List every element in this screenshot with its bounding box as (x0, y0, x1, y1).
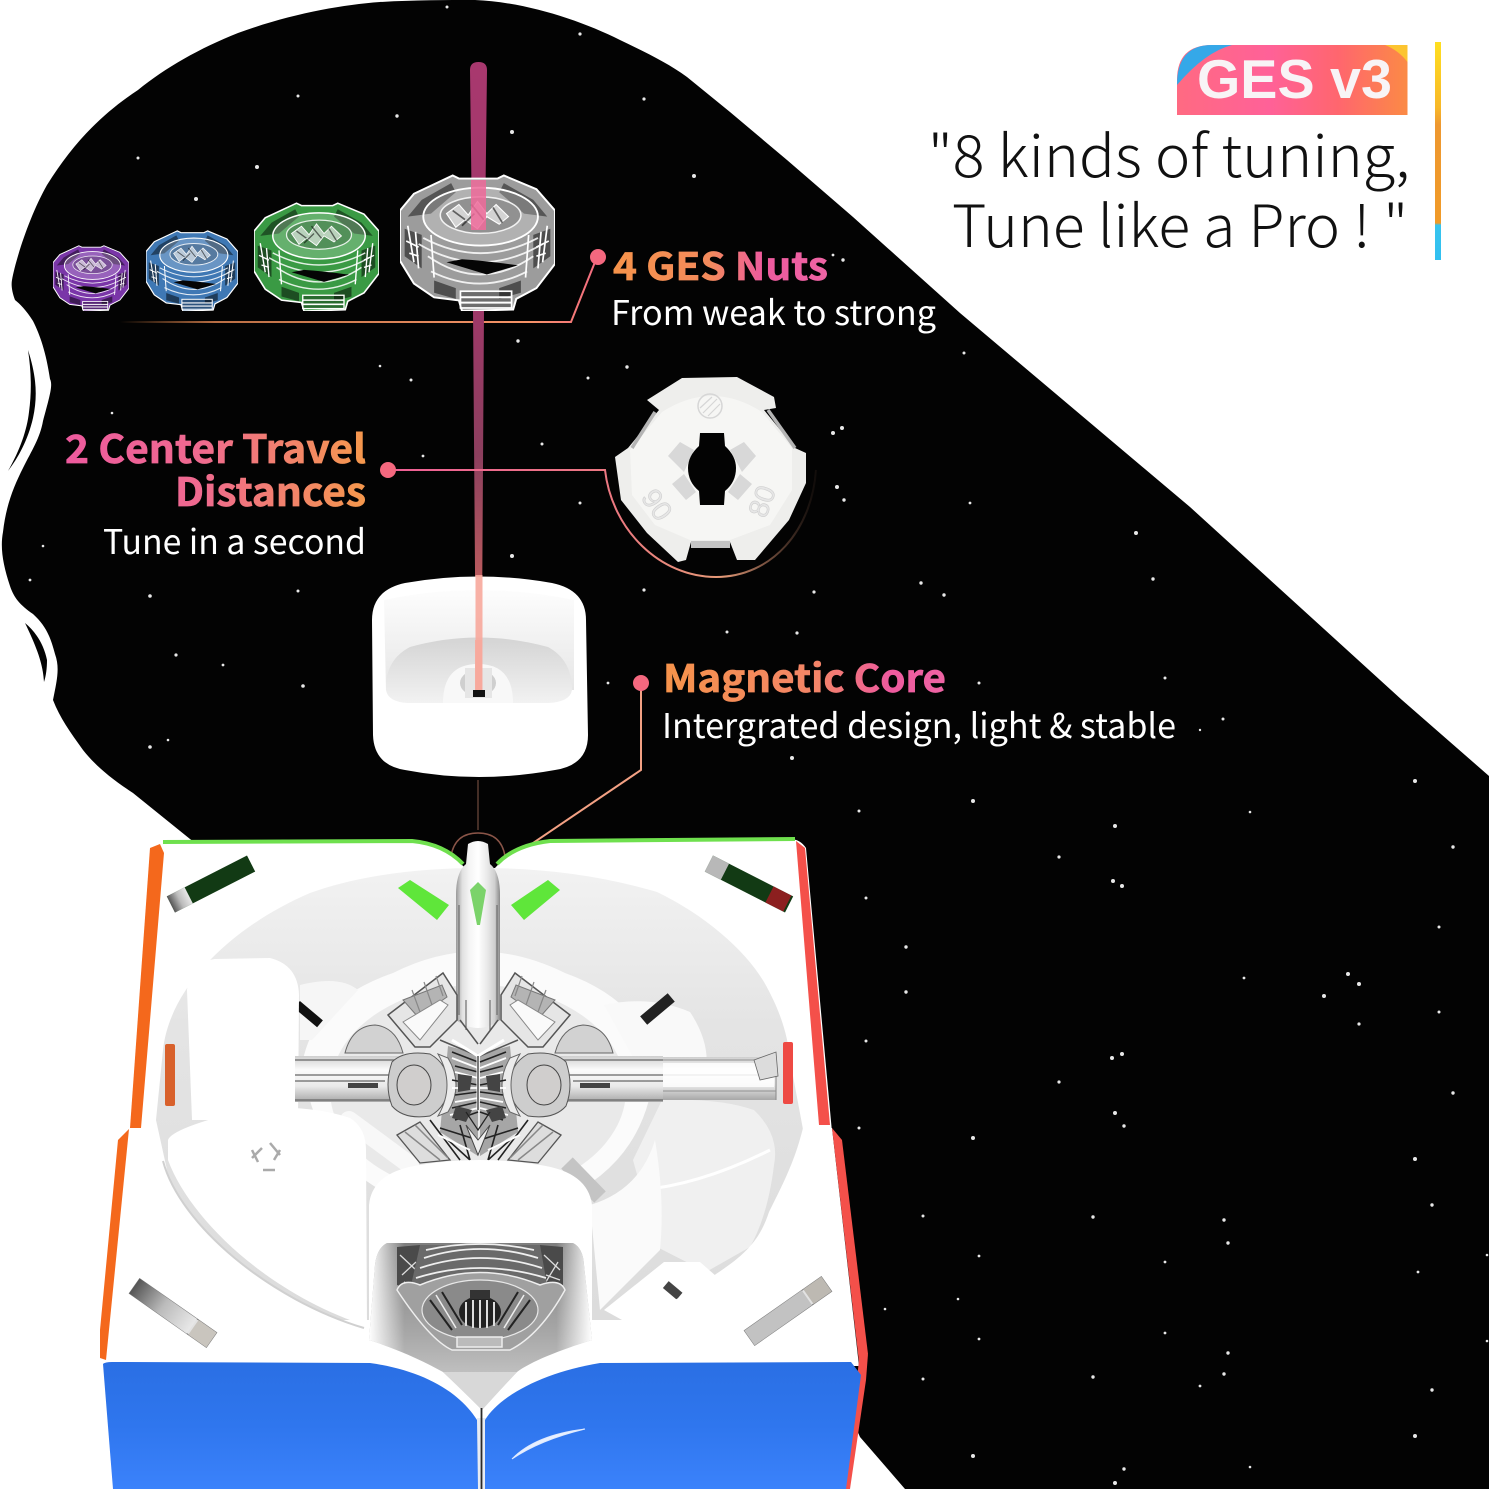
callout label: Magnetic Core: Intergrated design, light & stable (662, 699, 1176, 748)
callout line: magnetic core (451, 675, 649, 862)
slit: top right (705, 856, 793, 912)
wedge (590, 1140, 662, 1310)
cube: blue faces (103, 1354, 868, 1489)
green tab left (398, 880, 449, 920)
callout label: 2 Center Travel Distances: 2 Center Travel (65, 419, 366, 475)
quote: Tune like a Pro ! " (952, 180, 1408, 264)
notch mark (252, 1143, 280, 1170)
magnetic core cup (372, 576, 588, 777)
nut: purple (53, 246, 129, 311)
front orange edge (100, 1129, 129, 1360)
nut: clear (400, 176, 555, 311)
vertical color bar (1435, 42, 1441, 260)
slit: bottom right (744, 1277, 832, 1345)
side tab left (165, 1044, 175, 1106)
center travel ring part (615, 377, 806, 562)
top left white block (187, 958, 299, 1120)
side tab right (783, 1042, 793, 1104)
inner disc (156, 868, 805, 1320)
back red edge (796, 841, 830, 1125)
grey rod (567, 1163, 600, 1197)
front-left white piece (168, 1108, 367, 1326)
back orange edge (130, 844, 164, 1128)
left lobe (300, 981, 358, 1040)
center spine (452, 1040, 504, 1110)
nut: green (254, 203, 379, 311)
white capsule piece (349, 1120, 410, 1165)
laser passing through clear nut (471, 180, 486, 230)
right dome (633, 1100, 775, 1272)
callout label: 4 GES Nuts: 4 GES Nuts (613, 236, 828, 291)
swooshes on the left edge (8, 350, 47, 682)
callout label: 2 Center Travel Distances: Distances (175, 462, 366, 518)
right lobe (604, 1001, 707, 1076)
front center white piece (369, 1160, 592, 1345)
laser axis (470, 62, 487, 700)
slot left (294, 1001, 323, 1027)
callout line: 4 GES nuts (120, 249, 606, 322)
callout label: 2 Center Travel Distances: Tune in a second (103, 515, 366, 564)
green tab right (511, 880, 560, 920)
vertical tube (456, 841, 500, 1028)
core: right half mirrored (480, 973, 663, 1163)
quote (928, 110, 1410, 264)
blue highlight (512, 1429, 585, 1459)
center seam (477, 1418, 486, 1489)
slot right (640, 993, 675, 1025)
cube: back layer (129, 839, 832, 1330)
quote: "8 kinds of tuning, (928, 110, 1410, 194)
blue right face (485, 1362, 861, 1489)
callout label: Magnetic Core (662, 648, 1176, 748)
callout label: Magnetic Core: Magnetic Core (663, 648, 946, 703)
front white face (100, 1128, 859, 1424)
core: left half (295, 973, 478, 1163)
badge: GES v3: GES v3 (1197, 48, 1392, 110)
cube: front layer (100, 1108, 868, 1424)
inner ring (303, 952, 655, 1200)
engraved mark 80: 80 (742, 481, 782, 521)
red side strip (845, 1354, 868, 1489)
laser through cup (476, 575, 482, 690)
callout label: 2 Center Travel Distances (65, 419, 366, 564)
window with core nut (369, 1243, 592, 1410)
nut: blue (146, 231, 238, 311)
right tube extension (560, 1057, 776, 1100)
slit: top left (167, 856, 255, 912)
blue left face (103, 1362, 478, 1489)
front red edge (832, 1128, 868, 1362)
front left arc line (163, 1161, 364, 1328)
callout label: 4 GES Nuts (611, 236, 936, 335)
transparent magnetic core (295, 841, 778, 1163)
slit: bottom left (129, 1279, 217, 1347)
callout line: center travel (380, 462, 816, 577)
callout label: 4 GES Nuts: From weak to strong (611, 286, 936, 335)
engraved mark 90: 90 (635, 483, 679, 526)
